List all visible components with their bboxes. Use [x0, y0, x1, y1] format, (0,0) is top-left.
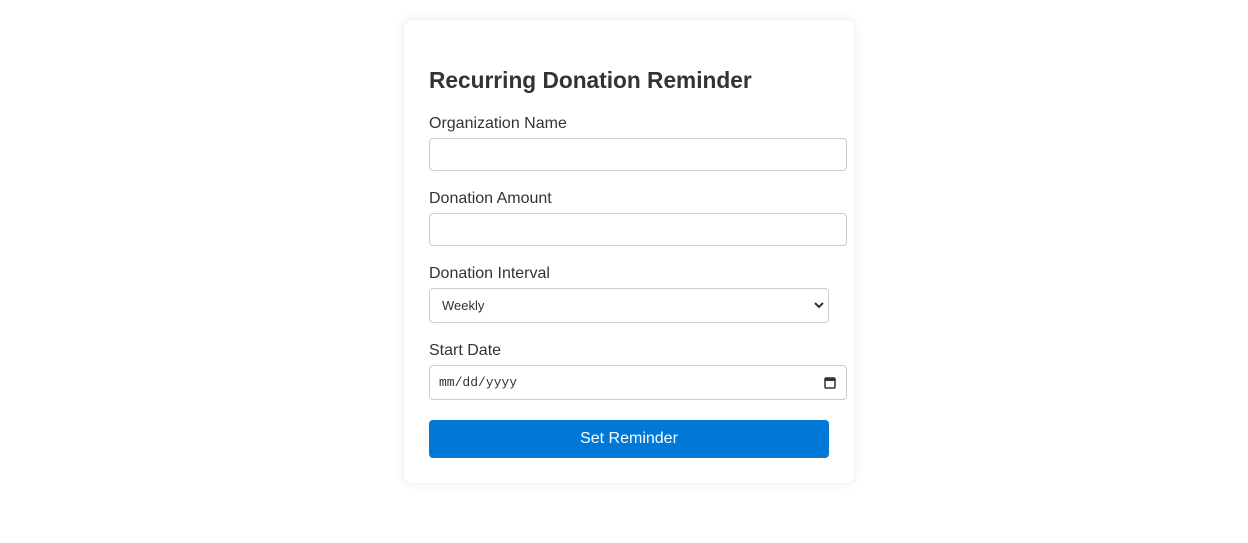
- input: organization name: [429, 138, 847, 171]
- input: start date: [429, 365, 847, 400]
- select: interval: Weekly: [442, 298, 484, 313]
- title: Recurring Donation Reminder: [429, 67, 752, 93]
- label: start date: Start Date: [429, 342, 501, 359]
- button: set reminder: [429, 420, 829, 458]
- select: interval: [429, 288, 829, 323]
- input: start date: mm/dd/yyyy: [439, 375, 517, 390]
- button: set reminder: Set Reminder: [580, 430, 678, 447]
- label: donation amount: Donation Amount: [429, 190, 552, 207]
- input: donation amount: [429, 213, 847, 246]
- label: donation interval: Donation Interval: [429, 265, 550, 282]
- label: organization name: Organization Name: [429, 115, 567, 132]
- panel: form card: [404, 20, 854, 483]
